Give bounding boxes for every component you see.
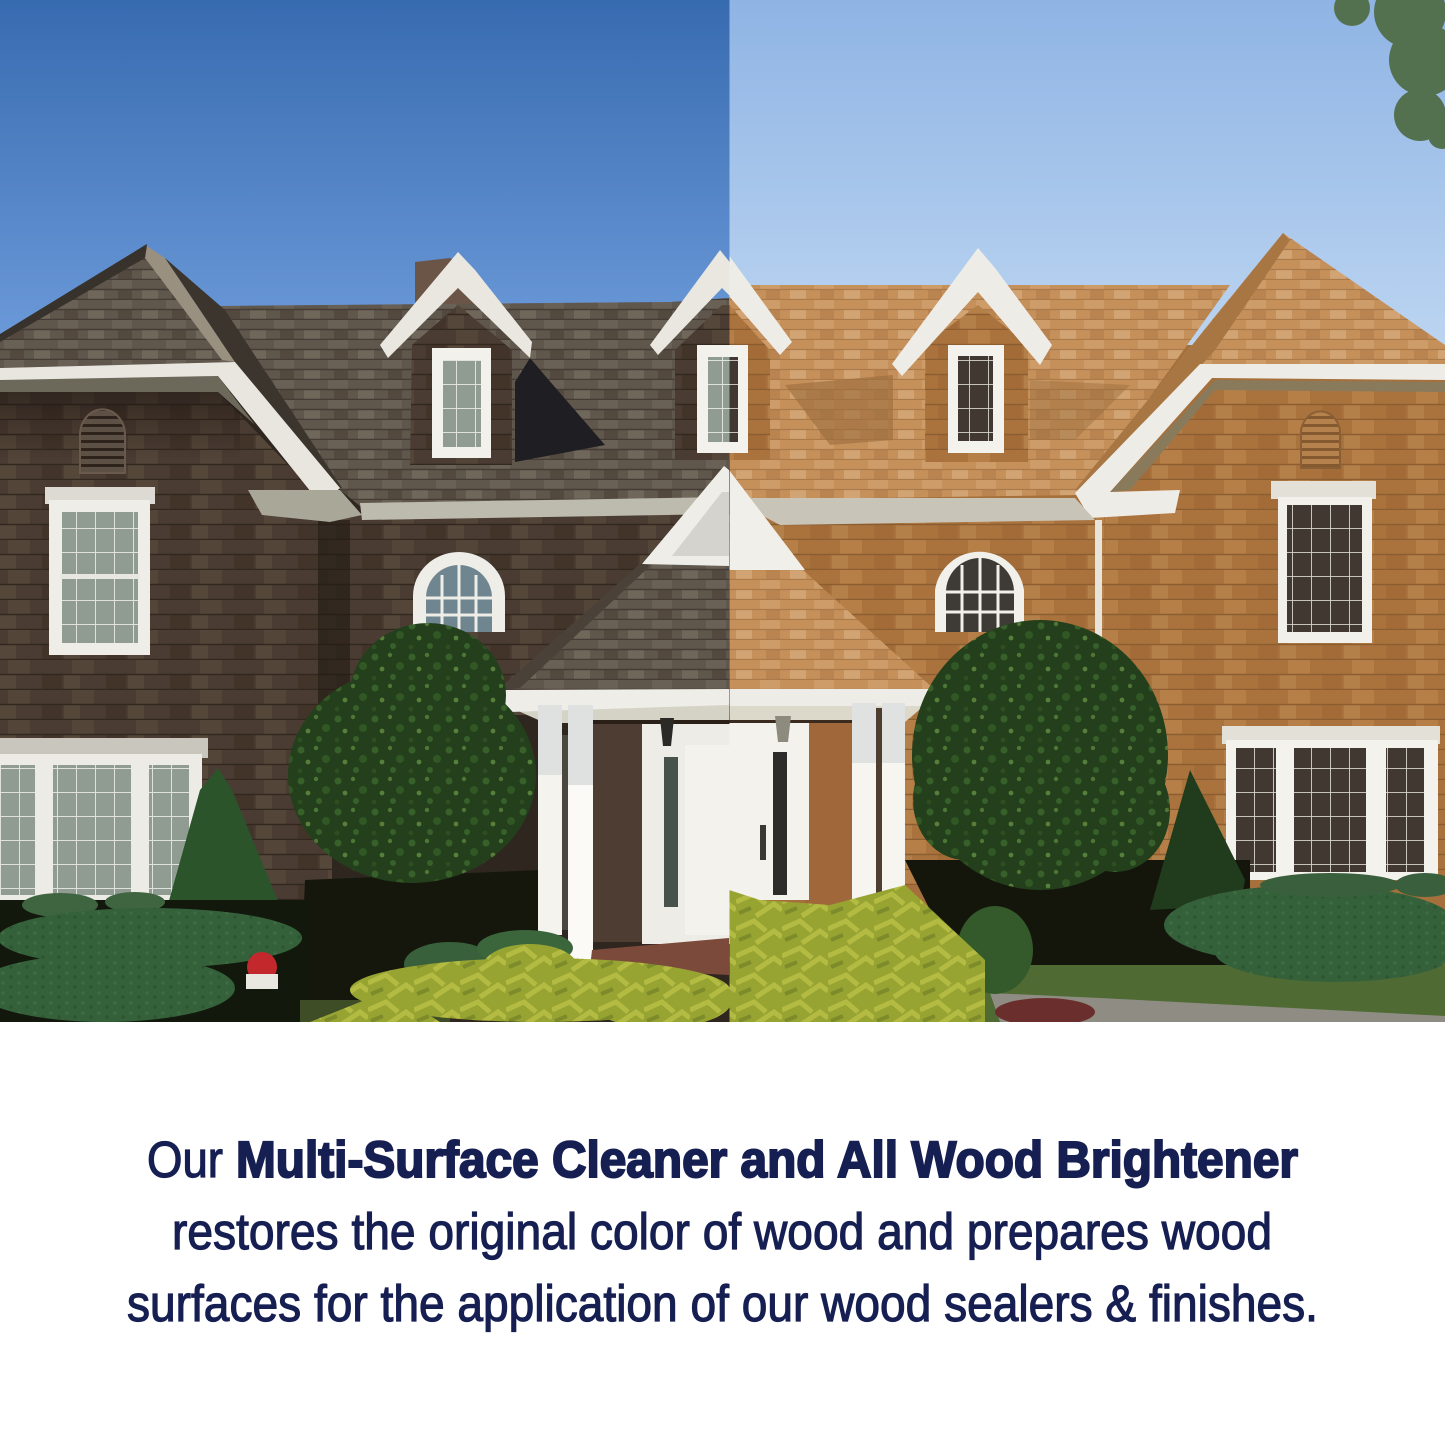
portico gable: before (642, 466, 729, 566)
lawn: before (300, 1000, 450, 1022)
right wall (1100, 388, 1445, 880)
soffit left (0, 376, 255, 425)
wall corner shadow (318, 520, 350, 720)
portico soffit and bar (505, 705, 730, 724)
base wall before (0, 340, 730, 1022)
white fascia right (1075, 364, 1445, 518)
right gable roof (1075, 233, 1445, 492)
lower left window (0, 738, 208, 904)
left gable roof (0, 245, 235, 368)
arched window left (413, 552, 505, 632)
hedges: after (957, 873, 1445, 994)
portico roof: after (729, 570, 935, 692)
wall shade (0, 392, 240, 444)
evergreen: after (1150, 770, 1245, 910)
portico fascia: after (729, 689, 942, 706)
steps (590, 938, 729, 975)
red shrub (995, 998, 1095, 1026)
tree: before (288, 623, 536, 883)
vent left (80, 409, 125, 473)
photo: before (weathered house) (0, 0, 736, 1028)
soffit right (1110, 380, 1445, 492)
gable ridge dark (0, 244, 147, 342)
tree: after (912, 620, 1170, 890)
dormer 3: after (785, 248, 1130, 462)
hedges: before (0, 892, 573, 1022)
dormer 2: after (725, 250, 792, 460)
portico roof: before (498, 564, 729, 690)
main roof: before (218, 298, 729, 506)
portico soffit: after (729, 705, 925, 723)
tree top right (1334, 0, 1445, 149)
eave main: after (729, 498, 1095, 525)
evergreen shrub (169, 768, 278, 900)
left wall (0, 392, 332, 935)
gable ridge: after (1075, 233, 1290, 490)
upper right window (1271, 481, 1376, 643)
columns: after (852, 703, 905, 903)
eave main (360, 498, 698, 520)
base wall after (729, 345, 1445, 1022)
porch wall: after (805, 712, 855, 912)
vent right (1301, 411, 1340, 468)
door surround: before (642, 724, 732, 944)
yellow shrub: after (729, 885, 985, 1022)
gable hip cap (145, 246, 235, 362)
middle wall (332, 515, 732, 715)
caption line 1: Our (147, 1131, 223, 1188)
caption line 1: Multi-Surface Cleaner and All Wood Brightener (236, 1131, 1298, 1188)
portico hip (498, 562, 650, 690)
ground base: after (985, 965, 1445, 1022)
porch wall (593, 724, 642, 942)
portico fascia: before (495, 689, 729, 712)
lantern: after (775, 716, 791, 742)
sky: after (729, 0, 1445, 345)
chimney (415, 258, 478, 305)
upper left window (45, 487, 155, 655)
caption line 2: restores the original color of wood and prepares wood (172, 1203, 1272, 1260)
lantern (660, 718, 674, 746)
downpipe (1095, 520, 1102, 645)
yellow shrub: before (310, 944, 732, 1028)
caption line 3: surfaces for the application of our wood sealers & finishes. (127, 1275, 1318, 1332)
main roof: after (729, 285, 1230, 500)
caption text (127, 1131, 1318, 1332)
portico gable: after (729, 470, 805, 570)
white fascia left (0, 362, 340, 497)
sky: before (0, 0, 730, 345)
door surround: after (729, 720, 809, 900)
arched window right (935, 552, 1024, 632)
middle wall: after (729, 515, 1104, 885)
sign (246, 952, 278, 989)
driveway (990, 993, 1445, 1022)
eave return (248, 490, 362, 522)
roof valley (165, 258, 342, 490)
dormer 1: before (380, 252, 605, 465)
columns: before (538, 705, 593, 960)
dark planting bed: after (905, 860, 1250, 970)
lower right window (1222, 726, 1440, 880)
dark underside: before (300, 870, 540, 1000)
dormer 2: before (650, 250, 736, 460)
photo: after (restored house) (725, 0, 1445, 1026)
